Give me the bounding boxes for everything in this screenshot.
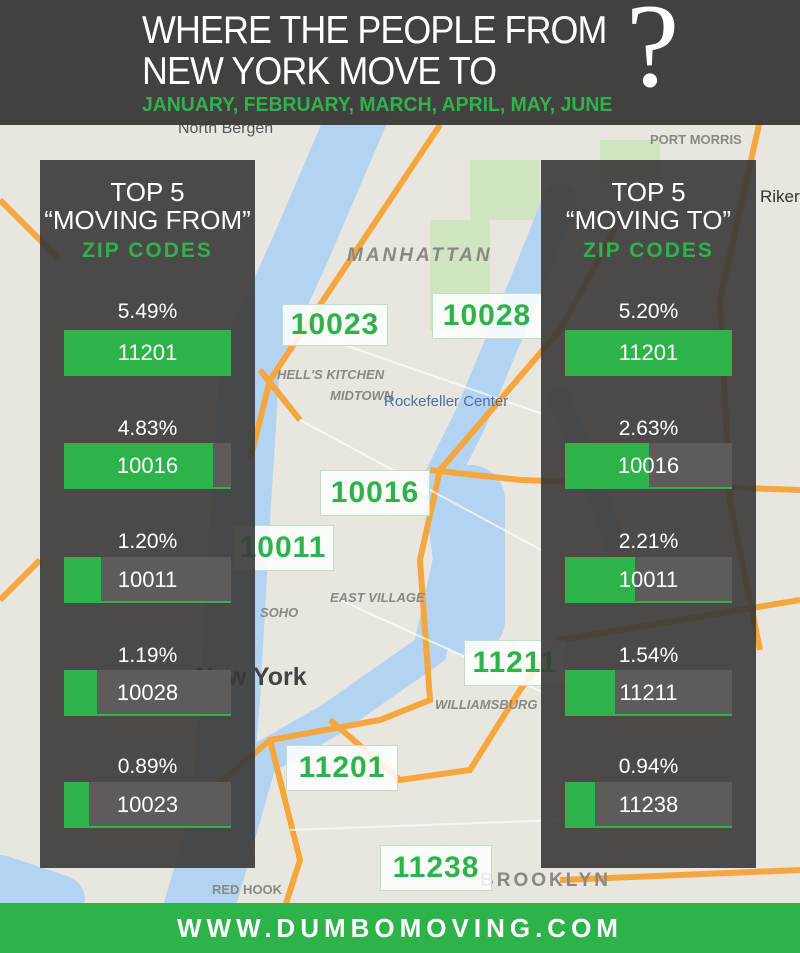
map labels: HELL'S KITCHEN xyxy=(277,367,384,382)
map labels: BROOKLYN xyxy=(480,870,611,891)
heading: TOP 5 xyxy=(611,177,686,207)
panel: moving to: 1.54% xyxy=(619,644,678,667)
zip labels on map: 10016 xyxy=(331,476,419,509)
heading xyxy=(566,177,731,262)
panel: moving from: 10011 xyxy=(118,567,177,592)
heading xyxy=(44,177,251,262)
panel: moving to: 2.21% xyxy=(619,530,678,553)
map labels: WILLIAMSBURG xyxy=(435,697,538,712)
panel: moving to: 2.63% xyxy=(619,417,678,440)
heading: “MOVING TO” xyxy=(566,205,731,235)
zip labels on map: 11238 xyxy=(393,851,479,884)
panel: moving from: 5.49% xyxy=(118,300,177,323)
map labels: MIDTOWN xyxy=(330,388,393,403)
panel: moving from: 1.19% xyxy=(118,644,177,667)
heading: TOP 5 xyxy=(110,177,185,207)
panel: moving from: 10016 xyxy=(117,453,178,478)
heading: “MOVING FROM” xyxy=(44,205,251,235)
panel: moving to: 10011 xyxy=(619,567,678,592)
zip labels on map: 11211 xyxy=(472,646,558,679)
heading: ZIP CODES xyxy=(82,239,213,262)
panel: moving from: 1.20% xyxy=(118,530,177,553)
title: WHERE THE PEOPLE FROM xyxy=(142,9,606,52)
title: NEW YORK MOVE TO xyxy=(142,50,496,93)
panel: moving from: 10023 xyxy=(117,792,178,817)
panel: moving from: 4.83% xyxy=(118,417,177,440)
title xyxy=(142,9,606,93)
map labels: North Bergen xyxy=(178,120,273,137)
panel: moving to: 11201 xyxy=(619,340,678,365)
panel: moving from: 0.89% xyxy=(118,755,177,778)
heading: ZIP CODES xyxy=(583,239,714,262)
map labels: Rockefeller Center xyxy=(384,393,508,410)
map labels: PORT MORRIS xyxy=(650,132,742,147)
footer: WWW.DUMBOMOVING.COM xyxy=(177,913,623,943)
map labels: New York xyxy=(195,663,307,691)
zip labels on map: 10028 xyxy=(443,299,531,332)
panel: moving to: 11238 xyxy=(619,792,678,817)
subtitle months: JANUARY, FEBRUARY, MARCH, APRIL, MAY, JUNE xyxy=(142,94,612,116)
footer xyxy=(0,903,800,953)
panel: moving to: 5.20% xyxy=(619,300,678,323)
panel: moving to xyxy=(541,160,756,868)
map labels: SOHO xyxy=(260,605,298,620)
map labels: RED HOOK xyxy=(212,882,282,897)
zip labels on map: 10011 xyxy=(240,531,326,564)
panel: moving from: 10028 xyxy=(117,680,178,705)
panel: moving from: 11201 xyxy=(118,340,177,365)
panel: moving to: 11211 xyxy=(620,680,677,705)
panel: moving to: 10016 xyxy=(618,453,679,478)
zip labels on map: 10023 xyxy=(291,308,379,341)
panel: moving from xyxy=(40,160,255,868)
map labels: EAST VILLAGE xyxy=(330,590,425,605)
map labels: MANHATTAN xyxy=(347,245,493,266)
header xyxy=(0,0,800,125)
zip labels on map: 11201 xyxy=(299,751,385,784)
panel: moving to: 0.94% xyxy=(619,755,678,778)
